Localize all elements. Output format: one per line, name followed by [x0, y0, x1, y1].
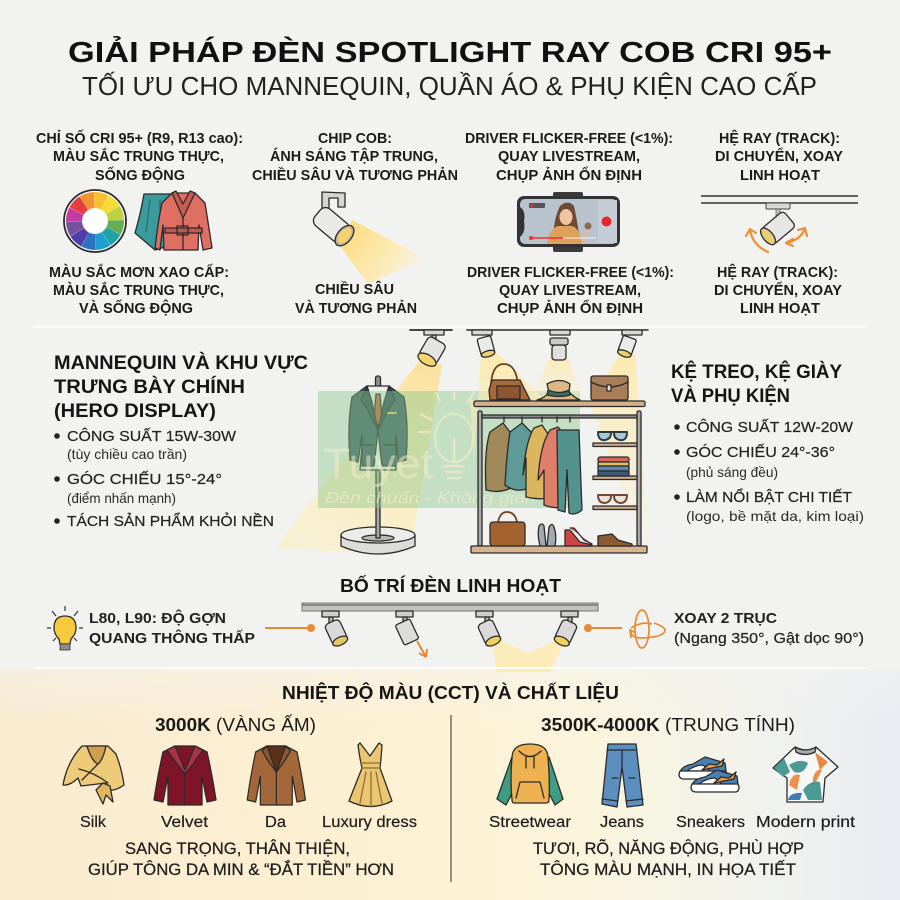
- caption: colour quality: [49, 263, 229, 317]
- side shelves with glasses and folded clothes: [593, 432, 637, 510]
- label: two axis rotation: (Ngang 350°, Gật dọc 90°): [674, 630, 864, 647]
- description: neutral: [533, 838, 804, 879]
- heading: driver: [465, 130, 673, 184]
- light beam on mannequin: [275, 360, 442, 552]
- bullet list: shelf specs: GÓC CHIẾU 24°-36°: [686, 444, 835, 461]
- heading: COB: CHIP COB:: [318, 130, 392, 147]
- panel: COB chip: [252, 130, 458, 317]
- panel: hero mannequin text: [54, 352, 308, 530]
- caption: colour quality: MÀU SẮC TRUNG THỰC,: [53, 281, 224, 299]
- heading: track: [715, 129, 843, 184]
- connector arrow: right: [584, 624, 622, 632]
- bullet list: hero specs: CÔNG SUẤT 15W-30W: [67, 428, 237, 445]
- panel: flexible layout: [47, 575, 864, 672]
- icon: sneakers: [679, 757, 739, 792]
- label: L80 L90: QUANG THÔNG THẤP: [89, 629, 255, 647]
- caption: COB: VÀ TƯƠNG PHẢN: [295, 300, 417, 317]
- column: 3000K warm: [63, 714, 417, 879]
- heading: hero display: [54, 352, 308, 422]
- caption: colour quality: VÀ SỐNG ĐỘNG: [79, 299, 193, 317]
- icon: phone livestream: [517, 192, 620, 252]
- bullet list: hero specs: (điểm nhấn mạnh): [67, 490, 176, 506]
- icon: teal fabric and salmon blazer: [135, 191, 212, 250]
- column divider: [450, 715, 452, 882]
- illustration: rack with shelves: [467, 330, 650, 553]
- garment rack: [478, 411, 641, 546]
- CCT background band: [0, 669, 900, 900]
- caption: COB: CHIỀU SÂU: [315, 280, 394, 298]
- heading: hero display: MANNEQUIN VÀ KHU VỰC: [54, 352, 308, 374]
- caption: driver: DRIVER FLICKER-FREE (<1%):: [467, 264, 674, 281]
- heading: CRI: SỐNG ĐỘNG: [95, 166, 185, 184]
- icon: colour wheel: [64, 190, 126, 252]
- icon: jeans: [602, 744, 643, 807]
- bullet list: hero specs: (tùy chiều cao trần): [67, 446, 187, 462]
- description: warm: [88, 839, 394, 879]
- panel: colour temperature and materials: [63, 682, 856, 882]
- heading: COB: ÁNH SÁNG TẬP TRUNG,: [270, 147, 438, 165]
- bullet list: shelf specs: (phủ sáng đều): [686, 464, 778, 480]
- panel: flicker-free driver: [465, 130, 674, 317]
- bullet list: hero specs: GÓC CHIẾU 15°-24°: [67, 471, 222, 488]
- heading: driver: CHỤP ẢNH ỔN ĐỊNH: [496, 166, 642, 184]
- caption: track: LINH HOẠT: [740, 300, 820, 317]
- column: 3500K-4000K neutral: [489, 715, 856, 879]
- label: modern print: Modern print: [756, 814, 856, 831]
- heading: hero display: TRƯNG BÀY CHÍNH: [54, 376, 245, 398]
- description: neutral: TƯƠI, RÕ, NĂNG ĐỘNG, PHÙ HỢP: [533, 838, 804, 858]
- label: luxury dress: Luxury dress: [322, 814, 417, 831]
- watermark: [318, 391, 580, 508]
- heading: shelves: [671, 361, 842, 407]
- mannequin display: [341, 376, 415, 554]
- caption: COB: [295, 280, 417, 317]
- title: TỐI ƯU CHO MANNEQUIN, QUẦN ÁO & PHỤ KIỆN CAO CẤP: [82, 71, 817, 101]
- label: two axis rotation: XOAY 2 TRỤC: [674, 610, 777, 627]
- caption: track: HỆ RAY (TRACK):: [717, 263, 838, 281]
- heading: driver: QUAY LIVESTREAM,: [498, 148, 640, 165]
- illustration: mannequin under spotlight: [275, 330, 452, 554]
- light beam: [340, 220, 425, 284]
- label: velvet: Velvet: [161, 814, 209, 831]
- heading: shelves: KỆ TREO, KỆ GIÀY: [671, 361, 842, 383]
- heading: CRI: CHỈ SỐ CRI 95+ (R9, R13 cao):: [36, 129, 243, 147]
- panel: CRI colour quality: [36, 129, 243, 317]
- bottom shelf with bag and shoes: [471, 512, 647, 553]
- heading: CCT: NHIỆT ĐỘ MÀU (CCT) VÀ CHẤT LIỆU: [282, 682, 619, 703]
- label: L80 L90: L80, L90: ĐỘ GỢN: [89, 609, 226, 627]
- label: jeans: Jeans: [600, 814, 644, 831]
- bullet list: shelf specs: (logo, bề mặt da, kim loại): [686, 508, 864, 524]
- heading: driver: DRIVER FLICKER-FREE (<1%):: [465, 130, 673, 147]
- label: streetwear: Streetwear: [489, 814, 571, 831]
- rack lights and beams: [467, 330, 650, 545]
- label: two axis rotation: [674, 610, 864, 647]
- panel: shelf and accessories text: [671, 361, 864, 524]
- bullet list: shelf specs: CÔNG SUẤT 12W-20W: [686, 419, 854, 436]
- heading: track: HỆ RAY (TRACK):: [719, 129, 840, 147]
- heading: CRI: MÀU SẮC TRUNG THỰC,: [53, 147, 224, 165]
- top shelf with bag, hat and satchel: [474, 364, 645, 406]
- heading: flexible layout: BỐ TRÍ ĐÈN LINH HOẠT: [340, 575, 561, 596]
- description: neutral: TÔNG MÀU MẠNH, IN HỌA TIẾT: [540, 860, 796, 879]
- watermark: Tuyet: [323, 440, 433, 488]
- bullet list: shelf specs: [674, 419, 864, 524]
- icon: rail and rotating spotlight: [701, 196, 858, 252]
- track and spotlight: [410, 330, 452, 369]
- heading: track: LINH HOẠT: [740, 167, 820, 184]
- panel: track rail: [701, 129, 858, 317]
- icon: luxury dress: [349, 743, 392, 807]
- icon: hoodie: [497, 744, 563, 805]
- icon: two axis rotation: [630, 610, 665, 648]
- heading: hero display: (HERO DISPLAY): [54, 401, 216, 422]
- heading: shelves: VÀ PHỤ KIỆN: [671, 385, 790, 407]
- heading: COB: [252, 130, 458, 184]
- bullet list: hero specs: TÁCH SẢN PHẨM KHỎI NỀN: [67, 512, 274, 530]
- description: warm: GIÚP TÔNG DA MIN & “ĐẮT TIỀN” HƠN: [88, 860, 394, 879]
- caption: driver: CHỤP ẢNH ỔN ĐỊNH: [497, 299, 643, 317]
- heading: CRI: [36, 129, 243, 184]
- icon: modern print tee: [773, 747, 838, 802]
- caption: driver: [467, 264, 674, 317]
- label: L80 L90: [89, 609, 255, 647]
- label: silk: Silk: [80, 814, 106, 831]
- bullet list: shelf specs: LÀM NỔI BẬT CHI TIẾT: [686, 488, 852, 506]
- watermark: Lights: [474, 440, 576, 488]
- subheading: 3000K: 3000K (VÀNG ẤM): [155, 714, 316, 735]
- title: GIẢI PHÁP ĐÈN SPOTLIGHT RAY COB CRI 95+: [68, 35, 832, 69]
- caption: colour quality: MÀU SẮC MƠN XAO CẤP:: [49, 263, 229, 281]
- title: [68, 35, 832, 101]
- connector arrow: left: [265, 624, 315, 632]
- icon: velvet blazer: [154, 746, 216, 805]
- icon: leather jacket: [247, 746, 305, 805]
- heading: COB: CHIỀU SÂU VÀ TƯƠNG PHẢN: [252, 166, 458, 184]
- track with four spotlights: [302, 603, 598, 672]
- caption: driver: QUAY LIVESTREAM,: [499, 282, 641, 299]
- caption: track: DI CHUYỂN, XOAY: [714, 281, 842, 299]
- heading: track: DI CHUYỂN, XOAY: [715, 147, 843, 165]
- label: sneakers: Sneakers: [676, 814, 745, 831]
- bullet list: hero specs: [54, 428, 274, 530]
- icon: light bulb: [47, 606, 83, 650]
- watermark: Đèn chuẩn - Không gian chất: [325, 489, 579, 507]
- icon: silk top: [63, 746, 124, 804]
- subheading: 3500K-4000K: 3500K-4000K (TRUNG TÍNH): [541, 715, 795, 735]
- caption: track: [714, 263, 842, 317]
- label: leather: Da: [265, 814, 286, 831]
- icon: COB spotlight: [310, 192, 358, 249]
- description: warm: SANG TRỌNG, THÂN THIỆN,: [125, 839, 350, 858]
